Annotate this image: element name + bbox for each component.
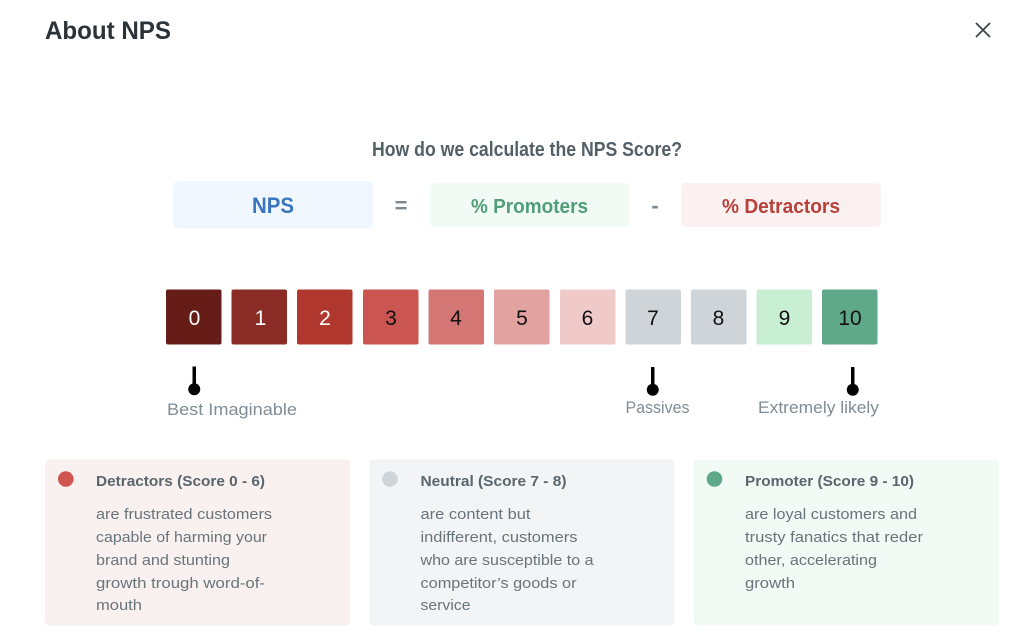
- equals sign: =: [395, 193, 407, 218]
- score 1: [232, 290, 287, 344]
- score 9: [756, 290, 812, 344]
- score 6: 6: [582, 307, 593, 330]
- marker: passives: Passives: [626, 398, 690, 417]
- score 6: [560, 290, 616, 344]
- neutral description: competitor’s goods or: [420, 576, 577, 592]
- icon: green dot: [707, 471, 722, 487]
- score 7: [626, 290, 681, 344]
- neutral description: service: [420, 598, 470, 614]
- promoter description: growth: [745, 576, 795, 592]
- formula term: NPS: NPS: [252, 193, 294, 218]
- promoter description: [745, 507, 923, 592]
- marker: passives: [626, 367, 690, 417]
- formula term: NPS: [173, 181, 373, 228]
- score 10: [822, 290, 878, 344]
- minus sign: -: [651, 193, 659, 218]
- neutral description: are content but: [420, 507, 530, 523]
- panel: detractors: [45, 460, 350, 626]
- score 0: [166, 290, 222, 344]
- icon: grey dot: [382, 471, 398, 487]
- score 9: 9: [779, 307, 790, 330]
- score 3: 3: [385, 307, 397, 330]
- score 0: 0: [189, 307, 200, 330]
- detractors description: brand and stunting: [96, 553, 230, 569]
- neutral description: indifferent, customers: [420, 530, 578, 546]
- detractors description: capable of harming your: [96, 530, 267, 546]
- heading: how the score is calculated: How do we calculate the NPS Score?: [372, 139, 682, 161]
- marker: best imaginable: [167, 366, 297, 419]
- formula term: promoters: [430, 183, 630, 227]
- neutral description: who are susceptible to a: [419, 553, 595, 569]
- score 7: 7: [647, 307, 659, 330]
- formula: [173, 181, 881, 228]
- score 5: [494, 290, 550, 344]
- promoter heading: Promoter (Score 9 - 10): [745, 474, 914, 490]
- score scale 0 to 10: [166, 290, 878, 344]
- detractors heading: Detractors (Score 0 - 6): [96, 474, 265, 490]
- marker: extremely likely: Extremely likely: [758, 398, 879, 417]
- formula term: promoters: % Promoters: [471, 196, 588, 218]
- promoter description: trusty fanatics that reder: [745, 530, 923, 546]
- panel: neutral: [370, 460, 674, 626]
- score 5: 5: [516, 307, 528, 330]
- score 4: 4: [450, 307, 462, 330]
- score 3: [363, 290, 418, 344]
- score 8: 8: [713, 307, 724, 330]
- neutral description: [419, 507, 595, 614]
- score 8: [691, 290, 746, 344]
- icon: red dot: [58, 471, 74, 487]
- score 4: [428, 290, 484, 344]
- score 2: [297, 290, 352, 344]
- promoter description: are loyal customers and: [745, 507, 917, 523]
- formula term: detractors: [681, 183, 881, 227]
- score 10: 10: [838, 307, 862, 330]
- score 1: 1: [255, 307, 266, 330]
- panel: promoter: [694, 460, 999, 626]
- detractors description: mouth: [96, 598, 142, 614]
- icon: close: [976, 23, 990, 37]
- title: About NPS: [45, 17, 171, 45]
- neutral heading: Neutral (Score 7 - 8): [420, 474, 567, 490]
- detractors description: [96, 507, 272, 614]
- formula term: detractors: % Detractors: [722, 196, 840, 218]
- marker: extremely likely: [758, 367, 879, 417]
- detractors description: growth trough word-of-: [96, 576, 265, 592]
- promoter description: other, accelerating: [745, 553, 877, 569]
- score 2: 2: [319, 307, 331, 330]
- detractors description: are frustrated customers: [96, 507, 272, 523]
- marker: best imaginable: Best Imaginable: [167, 400, 297, 419]
